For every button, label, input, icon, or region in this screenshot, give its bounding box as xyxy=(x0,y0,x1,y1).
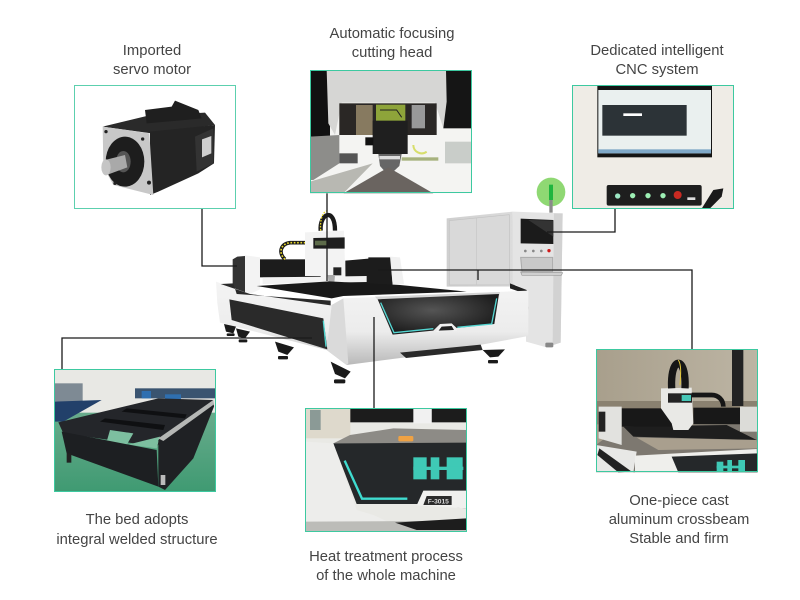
cable chain xyxy=(281,211,335,259)
label: imported servo motor: Imported xyxy=(123,43,181,59)
bed photo xyxy=(54,369,216,492)
panel: CNC system xyxy=(572,85,734,209)
panel: cutting head xyxy=(310,70,472,193)
motor photo xyxy=(101,100,215,195)
panel: crossbeam xyxy=(596,349,758,472)
heat treatment photo: F-3015 xyxy=(428,498,449,505)
cutting head photo xyxy=(310,70,472,193)
label: heat treatment process: Heat treatment process xyxy=(309,549,463,565)
label: one-piece cast aluminum crossbeam: Stable and firm xyxy=(629,531,729,547)
label: automatic focusing cutting head: cutting head xyxy=(352,45,432,61)
panel border xyxy=(54,370,216,492)
panel: servo motor xyxy=(74,85,236,208)
panel border xyxy=(572,86,734,208)
machine body xyxy=(216,282,528,365)
panel border xyxy=(596,350,758,472)
panel border xyxy=(310,70,472,192)
machine feet xyxy=(224,324,505,383)
label: heat treatment process: of the whole machine xyxy=(316,568,456,584)
CNC photo xyxy=(572,85,734,209)
label: automatic focusing cutting head: Automatic focusing xyxy=(329,26,455,42)
heat treatment photo xyxy=(305,408,466,532)
bed mesh xyxy=(257,281,467,298)
label: one-piece cast aluminum crossbeam: aluminum crossbeam xyxy=(609,512,749,528)
front dark panel xyxy=(378,294,499,335)
enclosure cabinet xyxy=(447,212,515,287)
panel border xyxy=(306,408,466,532)
panel: heat treatment xyxy=(305,408,466,532)
gantry beam xyxy=(259,257,393,285)
green alarm light highlight xyxy=(537,178,565,213)
cutting head carriage xyxy=(305,231,345,286)
connector lines xyxy=(62,193,692,408)
label: bed integral welded structure: integral welded structure xyxy=(56,532,218,548)
label: dedicated intelligent CNC system: Dedicated intelligent xyxy=(590,43,724,59)
control column xyxy=(510,212,563,347)
label: dedicated intelligent CNC system: CNC system xyxy=(615,62,699,78)
panel border xyxy=(74,86,236,208)
label: imported servo motor: servo motor xyxy=(113,62,191,78)
bottom vent xyxy=(400,345,483,358)
label: bed integral welded structure: The bed adopts xyxy=(86,512,188,528)
panel: welded bed xyxy=(54,369,216,492)
crossbeam photo xyxy=(596,349,758,472)
left dark panel xyxy=(229,299,327,349)
left gantry end xyxy=(233,255,404,294)
label: one-piece cast aluminum crossbeam: One-piece cast xyxy=(629,493,729,509)
central machine xyxy=(216,178,565,383)
